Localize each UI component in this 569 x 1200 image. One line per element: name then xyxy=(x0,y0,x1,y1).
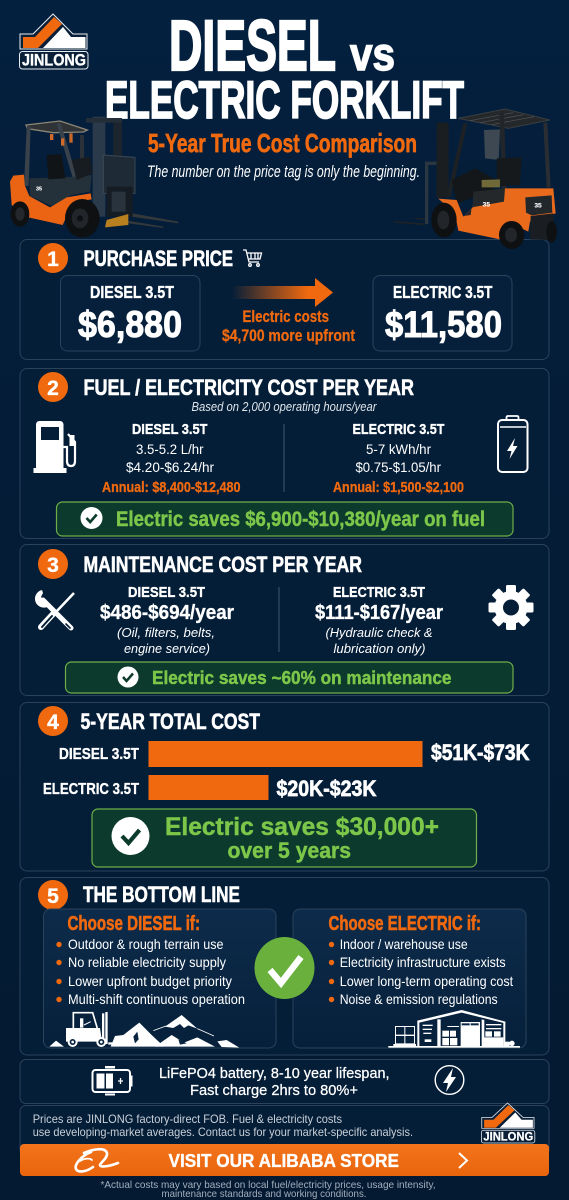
icon: check xyxy=(118,666,138,688)
panel: maintenance xyxy=(20,544,549,696)
callout: maintenance savings xyxy=(66,662,513,693)
footnote: maintenance standards and working conditions. xyxy=(162,1188,366,1200)
bar: electric xyxy=(43,775,377,801)
card: choose diesel: Choose DIESEL if: xyxy=(68,913,200,935)
list: diesel reasons: Outdoor & rough terrain use xyxy=(68,936,224,952)
icon: check xyxy=(80,507,102,529)
column: electric maintenance: lubrication only) xyxy=(334,641,426,656)
heading: purchase price: PURCHASE PRICE xyxy=(84,246,233,271)
icon: alibaba mark xyxy=(76,1149,118,1171)
illustration: diesel forklift: 35 xyxy=(36,187,42,193)
text: battery facts: Fast charge 2hrs to 80%+ xyxy=(190,1082,358,1099)
card: electric price xyxy=(373,276,512,351)
callout: fuel savings xyxy=(56,502,513,536)
list: electric reasons: Lower long-term operating cost xyxy=(340,973,513,989)
callout: total savings: over 5 years xyxy=(228,838,351,863)
list: electric reasons xyxy=(329,936,513,1007)
text: battery facts xyxy=(159,1065,390,1099)
icon: big check xyxy=(254,937,314,999)
bar: diesel: DIESEL 3.5T xyxy=(59,746,139,763)
callout: maintenance savings: Electric saves ~60% on maintenance xyxy=(152,668,452,688)
column: electric maintenance: $111-$167/year xyxy=(315,602,443,624)
column: diesel fuel: Annual: $8,400-$12,480 xyxy=(102,480,240,496)
step badge 2 xyxy=(38,372,68,402)
text: battery facts: LiFePO4 battery, 8-10 year lifespan, xyxy=(159,1065,390,1082)
text: pricing note xyxy=(33,1112,413,1139)
text: pricing note: use developing-market averages. Contact us for your market-specific analysis. xyxy=(33,1125,413,1139)
list: diesel reasons xyxy=(56,936,245,1007)
title xyxy=(105,7,464,130)
column: diesel maintenance: (Oil, filters, belts, xyxy=(117,625,215,640)
step badge 3: 3 xyxy=(47,554,59,577)
bar: diesel xyxy=(59,740,530,767)
step badge 5: 5 xyxy=(47,885,59,908)
step badge 2: 2 xyxy=(47,377,59,400)
card: diesel price xyxy=(60,276,200,351)
column: electric fuel: Annual: $1,500-$2,100 xyxy=(333,480,464,496)
list: diesel reasons: No reliable electricity supply xyxy=(68,954,226,970)
bar: diesel: $51K-$73K xyxy=(431,740,530,765)
column: diesel maintenance: $486-$694/year xyxy=(100,602,234,624)
column: diesel maintenance: engine service) xyxy=(124,641,210,656)
panel: pricing note xyxy=(20,1103,549,1156)
title: vs xyxy=(350,28,395,80)
heading: bottom line: THE BOTTOM LINE xyxy=(83,882,240,907)
panel: 5-year total cost xyxy=(20,702,549,871)
illustration: warehouse xyxy=(388,1010,520,1048)
card: diesel price: $6,880 xyxy=(78,304,182,345)
callout: electric costs more: $4,700 more upfront xyxy=(222,327,355,345)
illustration: electric forklift: 35 xyxy=(534,202,542,209)
icon: check xyxy=(112,817,150,855)
arrow xyxy=(232,278,333,307)
callout: electric costs more xyxy=(222,308,355,345)
list: electric reasons: Electricity infrastructure exists xyxy=(340,954,506,970)
icon: lightning bolt xyxy=(435,1066,464,1094)
column: diesel fuel: DIESEL 3.5T xyxy=(132,421,208,438)
panel: bottom line xyxy=(20,878,549,1055)
bar: electric: ELECTRIC 3.5T xyxy=(43,781,139,798)
icon: gear xyxy=(488,585,534,630)
button: visit alibaba store: VISIT OUR ALIBABA STORE xyxy=(168,1151,399,1171)
column: electric maintenance: (Hydraulic check & xyxy=(326,625,432,640)
icon: shopping cart xyxy=(243,250,262,266)
card: electric price: $11,580 xyxy=(385,304,502,345)
heading: fuel cost: FUEL / ELECTRICITY COST PER YEAR xyxy=(84,375,414,400)
step badge 4: 4 xyxy=(47,711,59,734)
list: electric reasons: Indoor / warehouse use xyxy=(340,936,468,952)
note: operating hours: Based on 2,000 operating hours/year xyxy=(192,400,377,414)
tagline: The number on the price tag is only the beginning. xyxy=(147,162,420,181)
illustration: forklift and mountains xyxy=(49,1012,239,1048)
logo: JINLONG: JINLONG xyxy=(22,52,86,70)
subtitle: 5-Year True Cost Comparison xyxy=(148,128,417,158)
list: diesel reasons: Lower upfront budget priority xyxy=(68,973,232,989)
logo: JINLONG xyxy=(20,14,88,70)
icon: wrench and screwdriver xyxy=(35,590,74,628)
card: choose electric: Choose ELECTRIC if: xyxy=(328,913,481,935)
step badge 5 xyxy=(38,880,68,910)
card: electric price: ELECTRIC 3.5T xyxy=(393,282,493,302)
column: electric fuel: 5-7 kWh/hr xyxy=(366,441,431,457)
icon: fuel pump xyxy=(34,421,75,473)
column: electric maintenance xyxy=(315,584,443,656)
column: electric fuel xyxy=(333,421,464,496)
card: diesel price: DIESEL 3.5T xyxy=(90,282,174,302)
list: electric reasons: Noise & emission regulations xyxy=(340,991,498,1007)
icon: battery xyxy=(498,416,528,472)
logo: JINLONG small: JINLONG xyxy=(483,1130,533,1143)
step badge 3 xyxy=(38,549,68,579)
bar: electric: $20K-$23K xyxy=(276,776,377,801)
callout: total savings xyxy=(92,809,476,867)
column: diesel maintenance xyxy=(100,584,234,656)
column: electric fuel: ELECTRIC 3.5T xyxy=(352,421,444,438)
footnote xyxy=(100,1179,436,1200)
panel: fuel cost xyxy=(20,368,549,538)
step badge 1: 1 xyxy=(47,248,59,271)
footnote: *Actual costs may vary based on local fuel/electricity prices, usage intensity, xyxy=(100,1179,436,1191)
column: diesel fuel: 3.5-5.2 L/hr xyxy=(136,441,204,457)
step badge 1 xyxy=(38,243,68,273)
list: diesel reasons: Multi-shift continuous operation xyxy=(68,991,245,1007)
panel: battery facts xyxy=(20,1060,549,1104)
callout: total savings: Electric saves $30,000+ xyxy=(165,813,439,841)
panel: purchase price xyxy=(20,240,549,360)
heading: maintenance: MAINTENANCE COST PER YEAR xyxy=(84,552,362,577)
illustration: electric forklift xyxy=(393,109,557,249)
callout: fuel savings: Electric saves $6,900-$10,380/year on fuel xyxy=(116,508,485,531)
column: diesel fuel: $4.20-$6.24/hr xyxy=(126,459,214,475)
card: choose electric xyxy=(293,909,526,1048)
card: choose diesel xyxy=(44,909,276,1048)
button: visit alibaba store xyxy=(20,1144,549,1176)
step badge 4 xyxy=(38,706,68,736)
column: diesel maintenance: DIESEL 3.5T xyxy=(128,584,205,601)
illustration: electric forklift: 35 xyxy=(483,202,490,209)
bar chart xyxy=(43,740,530,801)
logo: JINLONG small xyxy=(481,1103,535,1143)
column: electric maintenance: ELECTRIC 3.5T xyxy=(333,584,425,601)
callout: electric costs more: Electric costs xyxy=(242,308,329,326)
heading: total cost: 5-YEAR TOTAL COST xyxy=(80,709,260,734)
icon: battery cells xyxy=(92,1066,132,1096)
column: diesel fuel xyxy=(102,421,240,496)
column: electric fuel: $0.75-$1.05/hr xyxy=(356,459,441,475)
illustration: diesel forklift xyxy=(10,117,178,238)
text: pricing note: Prices are JINLONG factory-direct FOB. Fuel & electricity costs xyxy=(33,1112,342,1126)
icon: chevron xyxy=(459,1153,467,1168)
title: DIESEL xyxy=(169,7,336,86)
